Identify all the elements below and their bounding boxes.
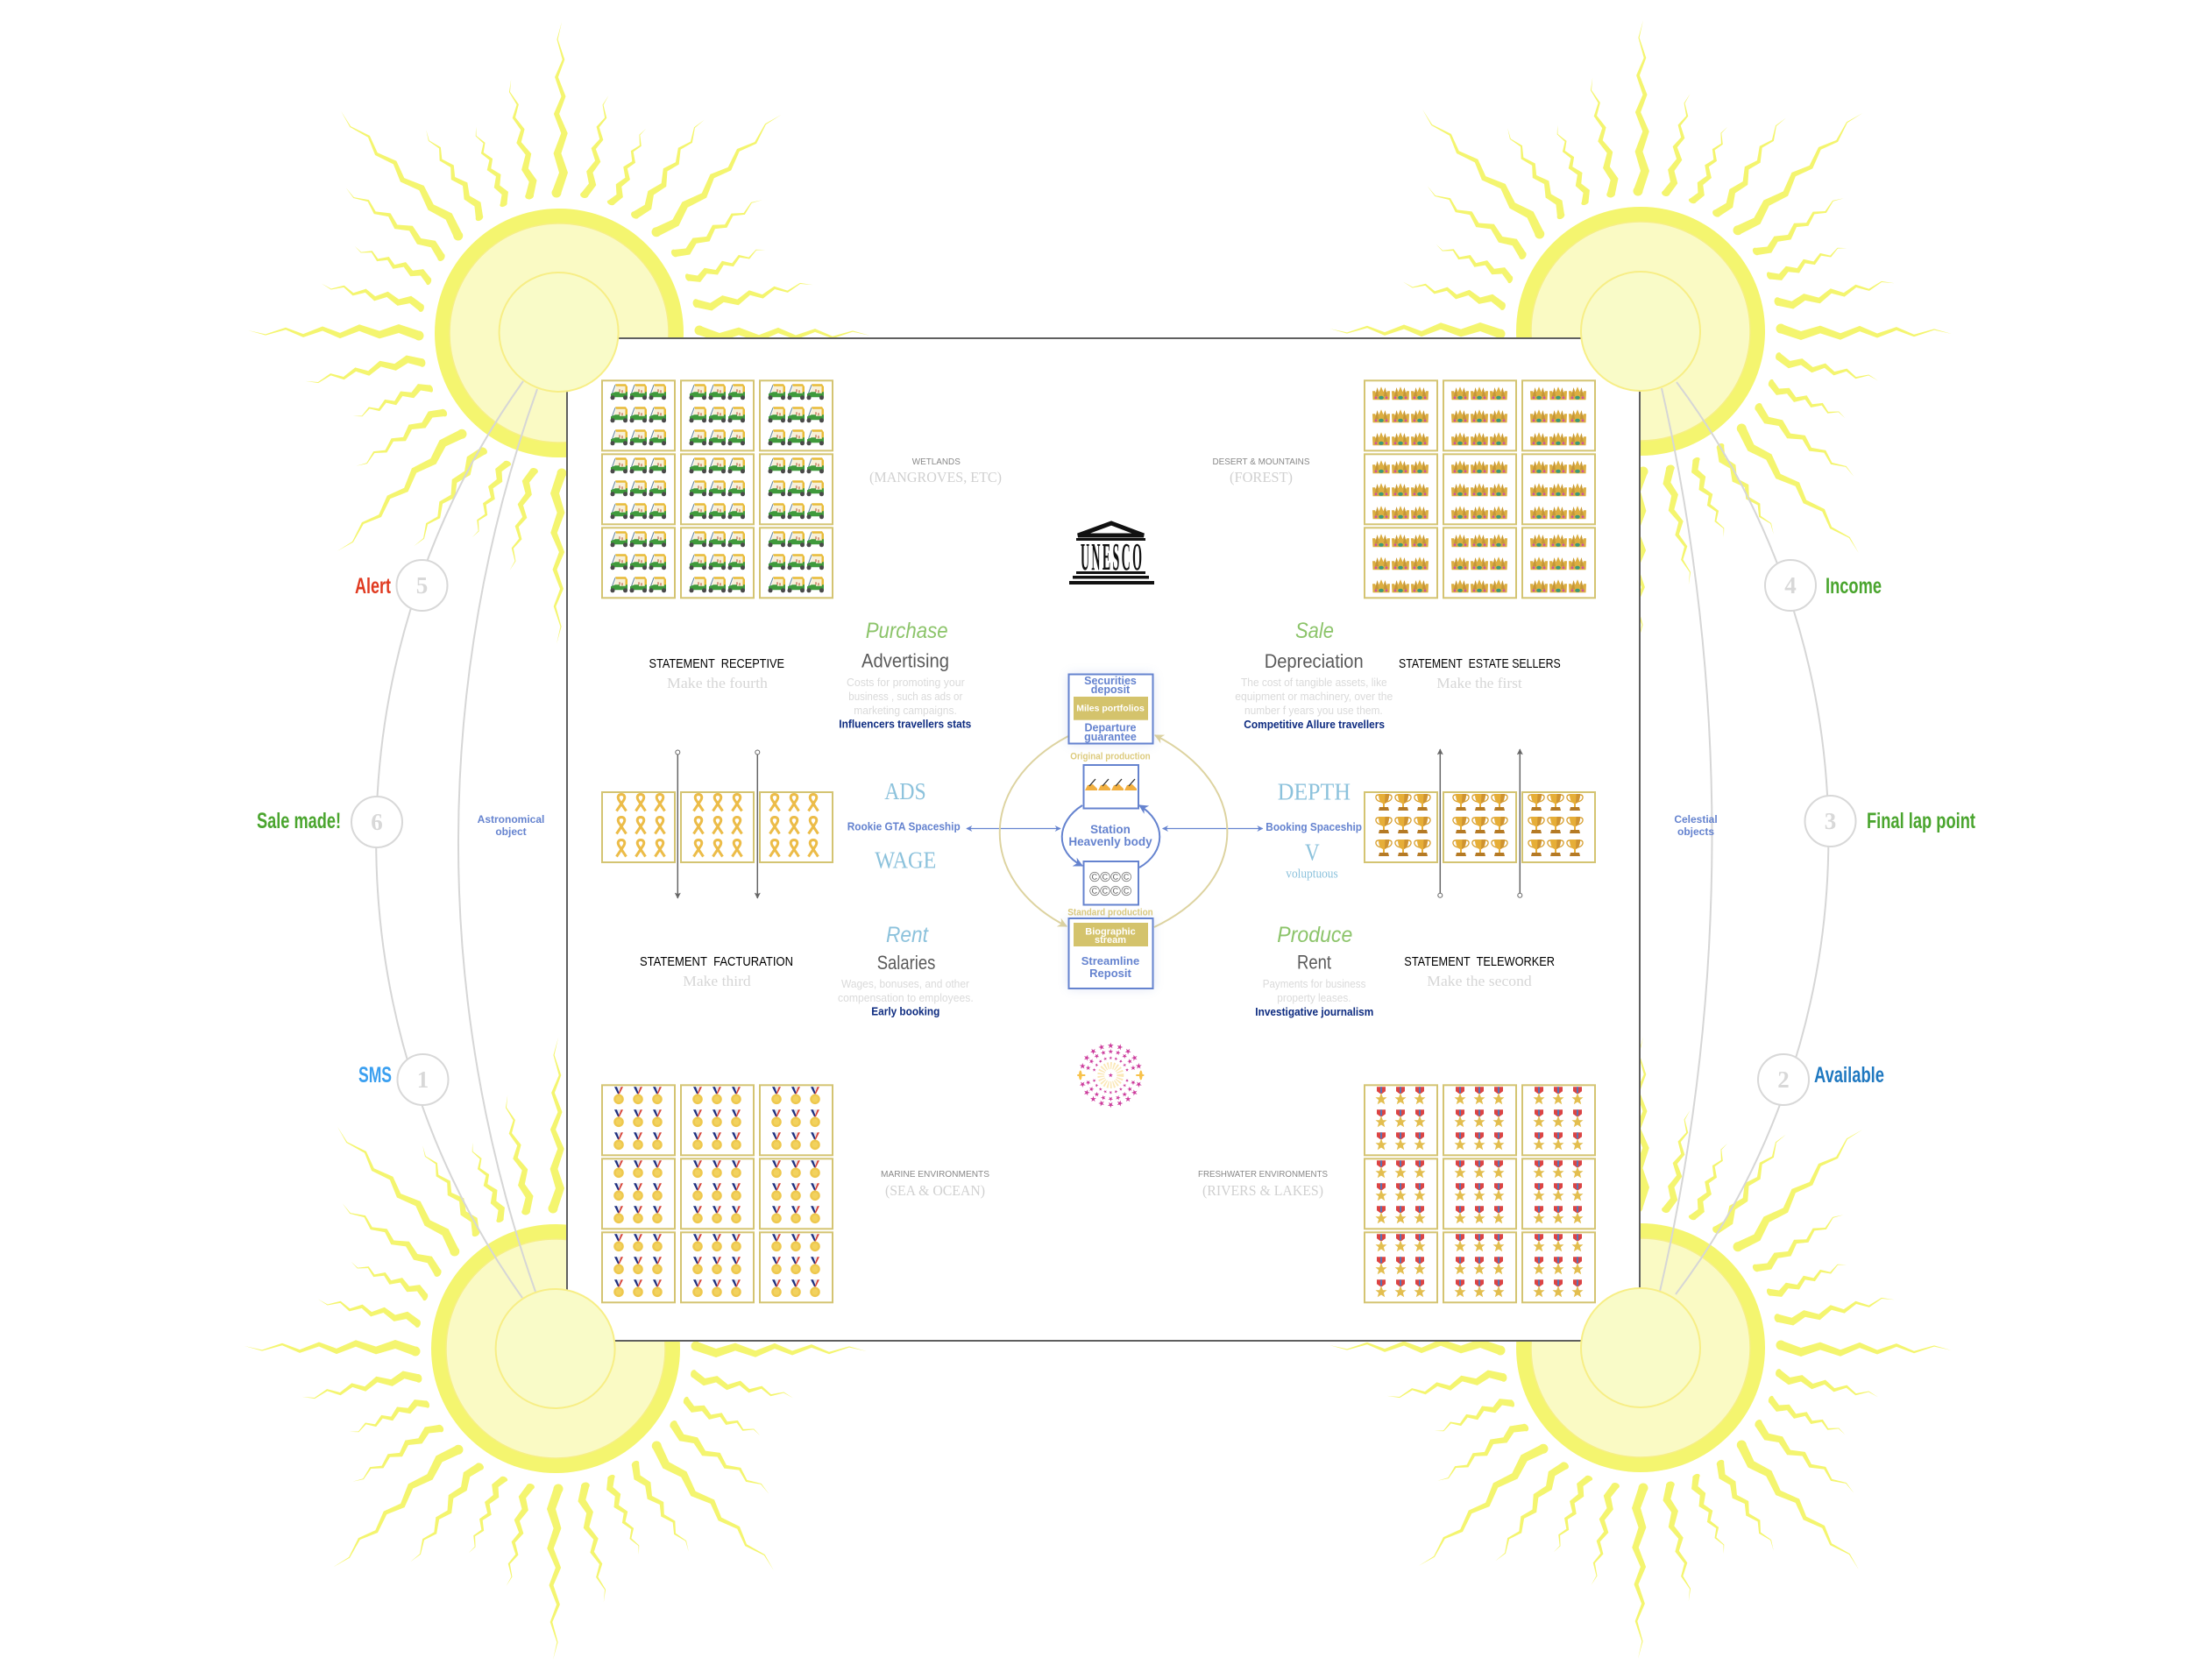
sun core: bottom right [1581, 1288, 1700, 1407]
block: sale depreciation: Depreciation [1265, 650, 1364, 672]
statement: facturation [640, 955, 793, 989]
sun: top left [248, 22, 870, 644]
label: original production: Original production [1070, 752, 1151, 762]
side note: celestial objects [1674, 813, 1718, 838]
label: DEPTH: DEPTH [1278, 779, 1351, 805]
tile grid: crowns [1365, 380, 1595, 598]
side note: astronomical object [478, 813, 544, 838]
block: produce rent: Produce [1277, 923, 1352, 947]
side note: astronomical object: Astronomical [478, 813, 544, 825]
step 3 marker with label Final lap point: Final lap point [1867, 809, 1975, 833]
label: station heavenly body: Heavenly body [1068, 835, 1152, 848]
step 2 marker with label Available: 2 [1777, 1066, 1790, 1093]
statement: receptive: Make the fourth [667, 675, 769, 691]
top box: Securities [1084, 675, 1137, 687]
bottom box: stream [1095, 935, 1126, 946]
block: rent salaries [838, 923, 974, 1018]
block: purchase advertising: marketing campaigns. [854, 705, 957, 717]
statement: teleworker: STATEMENT TELEWORKER [1404, 955, 1555, 969]
step 6 marker with label Sale made: Sale made! [257, 809, 341, 833]
sun core: top right [1581, 272, 1700, 391]
block: sale depreciation: Competitive Allure travellers [1244, 719, 1385, 731]
block: produce rent: property leases. [1277, 992, 1351, 1004]
copyright symbols box [1083, 861, 1138, 904]
step 1 marker with label SMS: SMS [358, 1063, 392, 1088]
down arrow 2 [755, 750, 760, 898]
block: produce rent: Payments for business [1263, 978, 1365, 990]
bottom box: Streamline [1081, 954, 1139, 967]
side note: celestial objects: Celestial [1674, 813, 1718, 825]
block: sale depreciation [1235, 619, 1393, 731]
block: produce rent: Investigative journalism [1255, 1006, 1373, 1018]
corner label: freshwater environments [1198, 1169, 1328, 1199]
sun core: top left [500, 273, 619, 392]
block: rent salaries: Rent [886, 923, 929, 947]
top box: deposit [1091, 684, 1131, 696]
tile row: trophies [1365, 792, 1595, 862]
label: station heavenly body: Station [1090, 823, 1131, 836]
step 5 marker with label Alert: 5 [416, 572, 428, 599]
block: produce rent: Rent [1297, 952, 1331, 974]
corner label: wetlands: (MANGROVES, ETC) [869, 469, 1002, 485]
statement: teleworker: Make the second [1427, 973, 1532, 989]
side note: astronomical object: object [495, 825, 527, 838]
step 3 marker with label Final lap point: 3 [1825, 808, 1836, 834]
side note: celestial objects: objects [1677, 825, 1714, 838]
right orbit arcs [1659, 382, 1828, 1295]
bottom box [1069, 918, 1153, 988]
sun: bottom right [1329, 1037, 1952, 1659]
step 4 marker with label Income: Income [1826, 574, 1882, 599]
top box: guarantee [1084, 731, 1137, 743]
corner label: desert and mountains [1213, 457, 1309, 485]
corner label: marine environments: (SEA & OCEAN) [885, 1182, 985, 1199]
icon: UNESCO temple logo: UNESCO [1081, 535, 1142, 579]
label: WAGE: WAGE [875, 847, 936, 874]
label: Rookie GTA Spaceship: Rookie GTA Spaceship [847, 820, 961, 833]
right double arrow [1163, 827, 1263, 829]
statement: estate sellers [1399, 657, 1561, 691]
label: station heavenly body [1068, 823, 1152, 848]
bottom box: Reposit [1089, 967, 1132, 980]
step 4 marker with label Income: 4 [1784, 572, 1797, 599]
step 6 marker with label Sale made [257, 797, 402, 847]
step 4 marker with label Income [1765, 560, 1882, 611]
central white frame [567, 338, 1640, 1341]
block: purchase advertising: Purchase [866, 619, 948, 643]
label: standard production: Standard production [1067, 908, 1153, 918]
label: V: V [1305, 840, 1320, 866]
corner label: wetlands [869, 457, 1002, 485]
blue arc right [1139, 805, 1159, 868]
block: purchase advertising: Influencers travellers stats [839, 719, 971, 731]
copyright symbols box: © [1089, 884, 1100, 899]
step 6 marker with label Sale made: 6 [371, 809, 383, 835]
bottom box shadow [1068, 918, 1153, 988]
block: sale depreciation: Sale [1295, 619, 1334, 643]
corner label: marine environments [881, 1169, 989, 1199]
left double arrow [967, 827, 1060, 829]
block: purchase advertising: Advertising [861, 650, 949, 672]
left orbit arcs [376, 381, 537, 1298]
step 2 marker with label Available: Available [1814, 1063, 1884, 1088]
step 1 marker with label SMS [358, 1054, 449, 1105]
statement: estate sellers: Make the first [1436, 675, 1522, 691]
block: rent salaries: compensation to employees. [838, 992, 974, 1004]
gold arc right [1154, 735, 1227, 927]
up arrow 1 [1438, 749, 1443, 897]
top box [1069, 675, 1153, 743]
up arrow 2 [1518, 749, 1522, 897]
step 5 marker with label Alert: Alert [355, 574, 391, 599]
copyright symbols box: © [1100, 884, 1110, 899]
icon: star burst [1077, 1043, 1144, 1108]
statement: facturation: Make third [683, 973, 751, 989]
step 2 marker with label Available [1758, 1054, 1884, 1105]
blue arc left [1062, 805, 1082, 866]
corner label: marine environments: MARINE ENVIRONMENTS [881, 1169, 989, 1180]
block: purchase advertising: business , such as ads or [848, 691, 962, 703]
step 5 marker with label Alert [355, 560, 447, 611]
tile grid: medals [602, 1085, 833, 1302]
block: rent salaries: Salaries [877, 952, 935, 974]
corner label: freshwater environments: FRESHWATER ENVIRONMENTS [1198, 1169, 1328, 1180]
writing hands box [1083, 765, 1138, 808]
top box: Departure [1084, 722, 1137, 734]
block: sale depreciation: equipment or machinery, over the [1235, 691, 1393, 703]
label: voluptuous: voluptuous [1286, 868, 1338, 882]
top box shadow [1068, 674, 1153, 744]
copyright symbols box: © [1121, 870, 1131, 885]
step 1 marker with label SMS: 1 [417, 1066, 429, 1093]
copyright symbols box: © [1110, 884, 1121, 899]
corner label: desert and mountains: DESERT & MOUNTAINS [1213, 457, 1309, 467]
tile grid: star medals [1365, 1085, 1595, 1302]
block: rent salaries: Wages, bonuses, and other [841, 978, 969, 990]
copyright symbols box: © [1110, 870, 1121, 885]
corner label: wetlands: WETLANDS [912, 457, 961, 467]
copyright symbols box: © [1100, 870, 1110, 885]
down arrow 1 [676, 750, 680, 898]
statement: receptive [649, 657, 784, 691]
tile grid: rickshaws [602, 380, 833, 598]
block: sale depreciation: number f years you use them. [1244, 705, 1383, 717]
block: sale depreciation: The cost of tangible assets, like [1241, 677, 1387, 689]
copyright symbols box: © [1121, 884, 1131, 899]
label: ADS: ADS [884, 778, 926, 804]
statement: facturation: STATEMENT FACTURATION [640, 955, 793, 969]
central cycle diagram [1000, 674, 1227, 988]
statement: estate sellers: STATEMENT ESTATE SELLERS [1399, 657, 1561, 671]
icon: UNESCO temple logo [1069, 523, 1154, 584]
corner label: freshwater environments: (RIVERS & LAKES) [1202, 1182, 1323, 1199]
block: purchase advertising: Costs for promoting your [847, 677, 965, 689]
block: rent salaries: Early booking [871, 1006, 939, 1018]
statement: teleworker [1404, 955, 1555, 989]
bottom box: Biographic [1085, 927, 1136, 938]
corner label: desert and mountains: (FOREST) [1230, 469, 1293, 485]
step 3 marker with label Final lap point [1805, 796, 1975, 847]
label: Booking Spaceship: Booking Spaceship [1266, 820, 1362, 833]
copyright symbols box: © [1089, 870, 1100, 885]
top box: Miles portfolios [1076, 703, 1145, 713]
sun: top right [1329, 20, 1952, 642]
gold arc left [1000, 736, 1068, 926]
statement: receptive: STATEMENT RECEPTIVE [649, 657, 784, 671]
block: produce rent [1255, 923, 1373, 1018]
tile row: ribbons [602, 792, 833, 862]
block: purchase advertising [839, 619, 971, 731]
sun: bottom left [245, 1038, 867, 1660]
sun core: bottom left [496, 1289, 615, 1408]
